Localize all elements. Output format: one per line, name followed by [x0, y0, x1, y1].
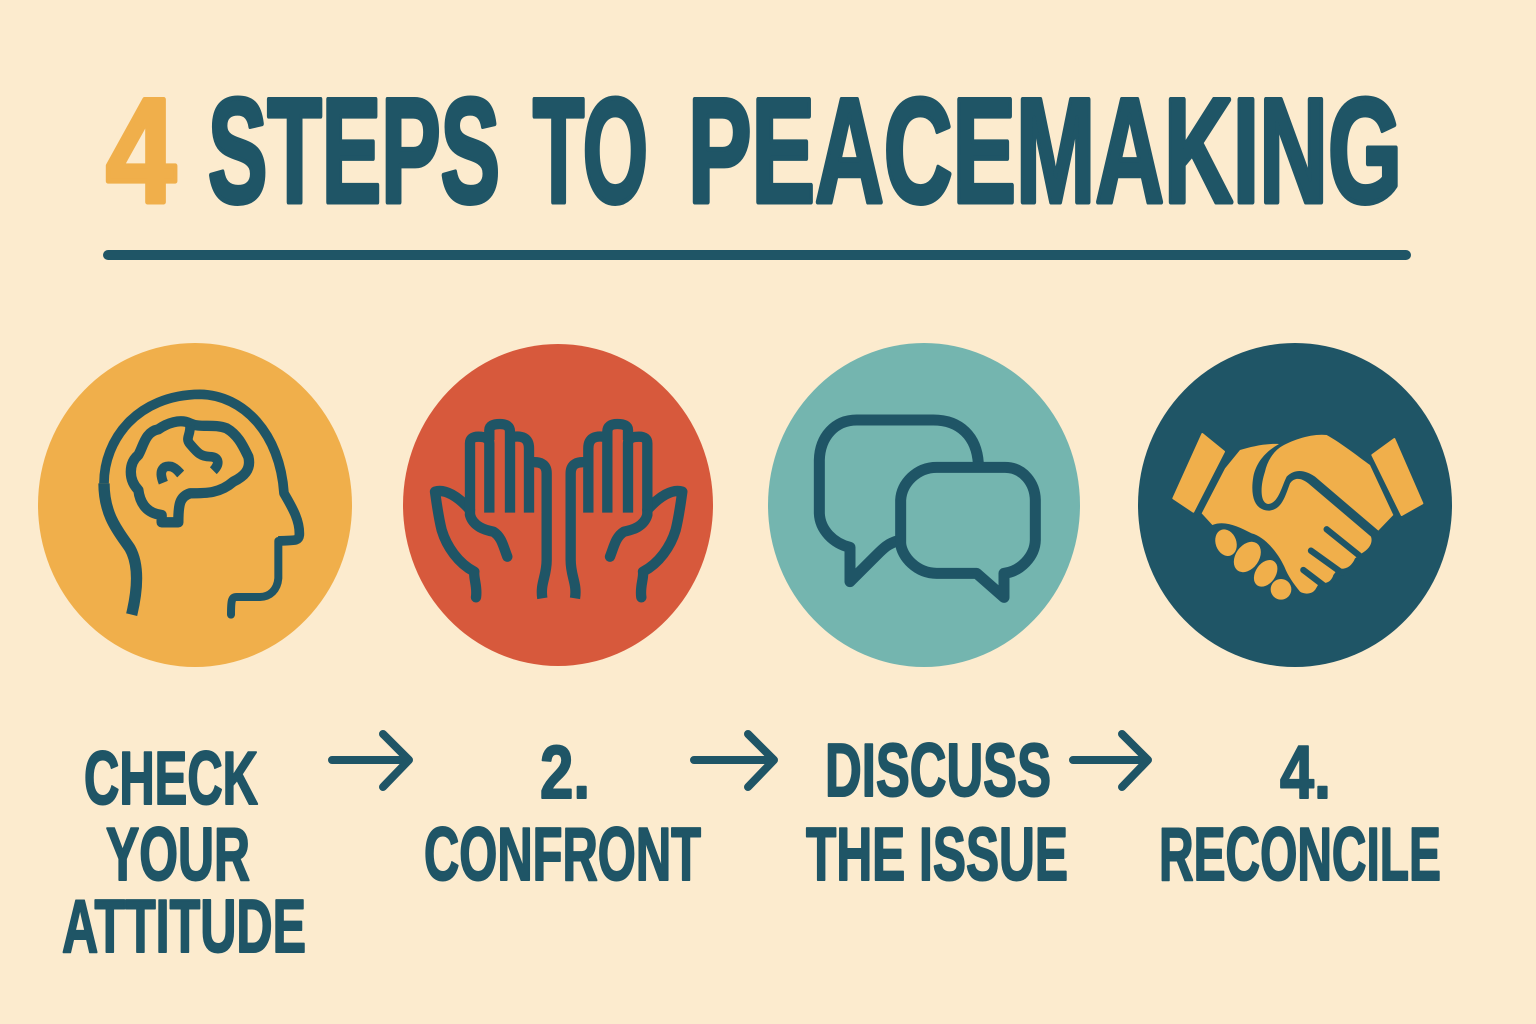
step 1 label: YOUR [106, 812, 250, 896]
icon: speech bubbles [819, 420, 1035, 597]
step 2 label: 2. [540, 730, 590, 814]
title [106, 67, 1402, 234]
step 1 label: CHECK [84, 736, 258, 820]
step 1 label [62, 736, 306, 968]
step 3 label: DISCUSS [825, 728, 1051, 812]
step 3 label [806, 728, 1068, 896]
title: TO [533, 67, 648, 234]
step 4 label: 4. [1280, 730, 1331, 814]
icon: open hands [435, 424, 682, 598]
step 3 label: THE ISSUE [806, 812, 1068, 896]
step 1 label: ATTITUDE [62, 884, 306, 968]
step 2 circle: open hands [403, 344, 713, 666]
step 2 label: CONFRONT [424, 812, 701, 896]
step 2 label [424, 730, 701, 896]
arrow 1 [332, 734, 409, 787]
arrow 2 [694, 734, 774, 787]
title: 4 [106, 67, 176, 234]
title: STEPS [208, 67, 500, 234]
step 4 circle: handshake [1138, 343, 1452, 667]
arrow 3 [1073, 734, 1148, 787]
step 3 circle: speech bubbles [768, 343, 1080, 667]
icon: head with brain [104, 394, 299, 615]
step 1 circle: head with brain [38, 343, 352, 667]
icon: handshake [1173, 434, 1422, 600]
step 4 label [1159, 730, 1441, 896]
